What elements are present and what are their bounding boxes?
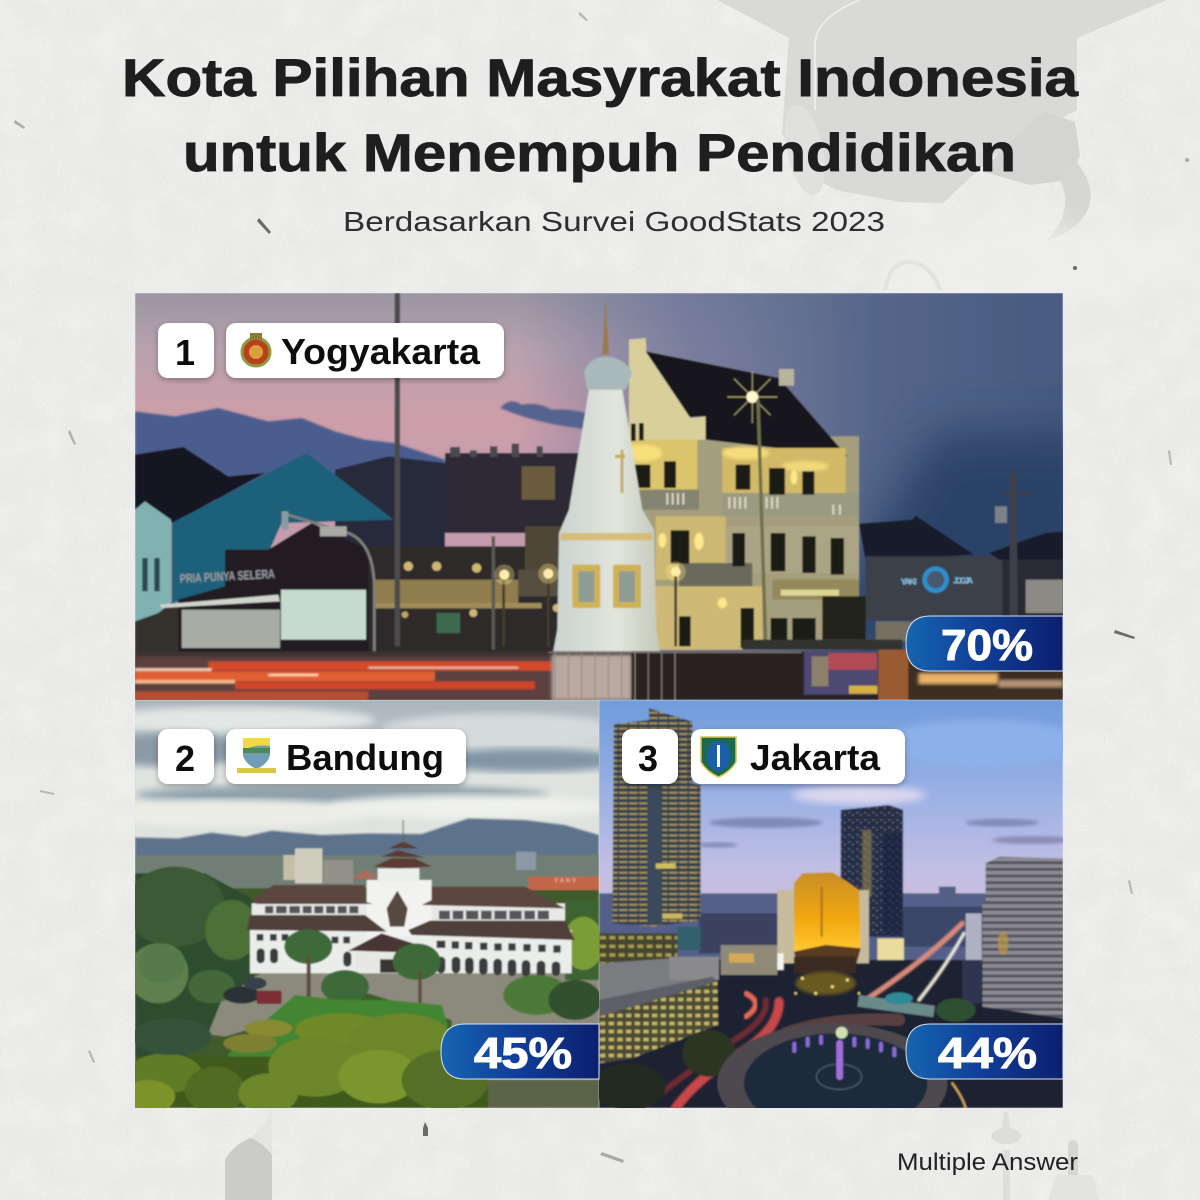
right tower <box>962 857 1063 1018</box>
rank badge 2 <box>158 729 214 784</box>
rank badge 1: 1 <box>175 332 195 373</box>
percent badge: 70% <box>906 616 1063 671</box>
road light trails <box>135 650 1063 700</box>
heritage building: K.Ojil <box>666 651 696 663</box>
cloudy sky <box>85 700 628 867</box>
fountain roundabout <box>717 1023 947 1143</box>
rank badge 1 <box>158 323 214 378</box>
panel: Yogyakarta photo <box>135 293 1102 700</box>
rank badge 2: 2 <box>175 738 195 779</box>
percent badge: 70%: 70% <box>941 621 1033 670</box>
governor building <box>247 820 575 977</box>
sky <box>135 293 1102 700</box>
left tower <box>612 708 701 927</box>
panel: Jakarta photo <box>599 700 1063 1108</box>
fence and billboard <box>548 651 878 700</box>
sign text: PRIA PUNYA SELERA <box>179 567 275 586</box>
central dark tower <box>841 805 903 937</box>
city label: Bandung <box>226 729 466 784</box>
right sky building: YAKI <box>901 577 917 587</box>
foreground trees <box>122 1013 599 1113</box>
city label: Yogyakarta <box>226 323 504 378</box>
footnote: Multiple Answer <box>897 1149 1078 1176</box>
city band: YAHY <box>554 879 578 885</box>
distant city <box>599 887 1063 980</box>
tugu monument <box>552 296 661 656</box>
road light trails <box>642 923 966 1108</box>
left low buildings <box>599 927 719 1063</box>
city label: Bandung: Bandung <box>286 737 444 778</box>
percent badge: 44% <box>906 1024 1063 1079</box>
scroll watermark <box>880 205 1200 300</box>
panel: Bandung photo <box>135 700 599 1108</box>
ground <box>599 960 1063 1108</box>
title: Kota Pilihan Masyrakat Indonesia <box>122 49 1079 108</box>
dusk sky <box>599 700 1063 894</box>
right sky building: JOGJA <box>953 576 974 586</box>
driveway <box>208 972 599 1081</box>
city label: Yogyakarta: Yogyakarta <box>281 331 481 372</box>
parked cars <box>223 977 282 1004</box>
trees left <box>125 867 603 1067</box>
plaza lights <box>592 972 976 1110</box>
monument watermark right <box>991 1112 1100 1200</box>
city band <box>135 848 599 890</box>
street buildings left <box>135 444 582 656</box>
rank badge 3 <box>622 729 678 784</box>
title: untuk Menempuh Pendidikan <box>183 124 1016 183</box>
title <box>122 49 1079 183</box>
mountains <box>135 818 599 863</box>
right sky building <box>859 473 1063 641</box>
subtitle: Berdasarkan Survei GoodStats 2023 <box>343 206 885 237</box>
lawn <box>228 994 448 1058</box>
palms <box>138 929 602 1020</box>
golden hotel <box>721 872 904 975</box>
city label: Jakarta <box>691 729 905 784</box>
percent badge: 44%: 44% <box>938 1029 1037 1078</box>
percent badge: 45% <box>441 1024 599 1079</box>
graduation cap watermark <box>717 0 1167 240</box>
percent badge: 45%: 45% <box>474 1029 572 1078</box>
monument watermark left <box>225 1108 272 1200</box>
heritage building <box>622 338 902 663</box>
rank badge 3: 3 <box>638 738 658 779</box>
city label: Jakarta: Jakarta <box>750 737 881 778</box>
flower beds <box>223 1020 292 1053</box>
street lights <box>282 293 561 653</box>
